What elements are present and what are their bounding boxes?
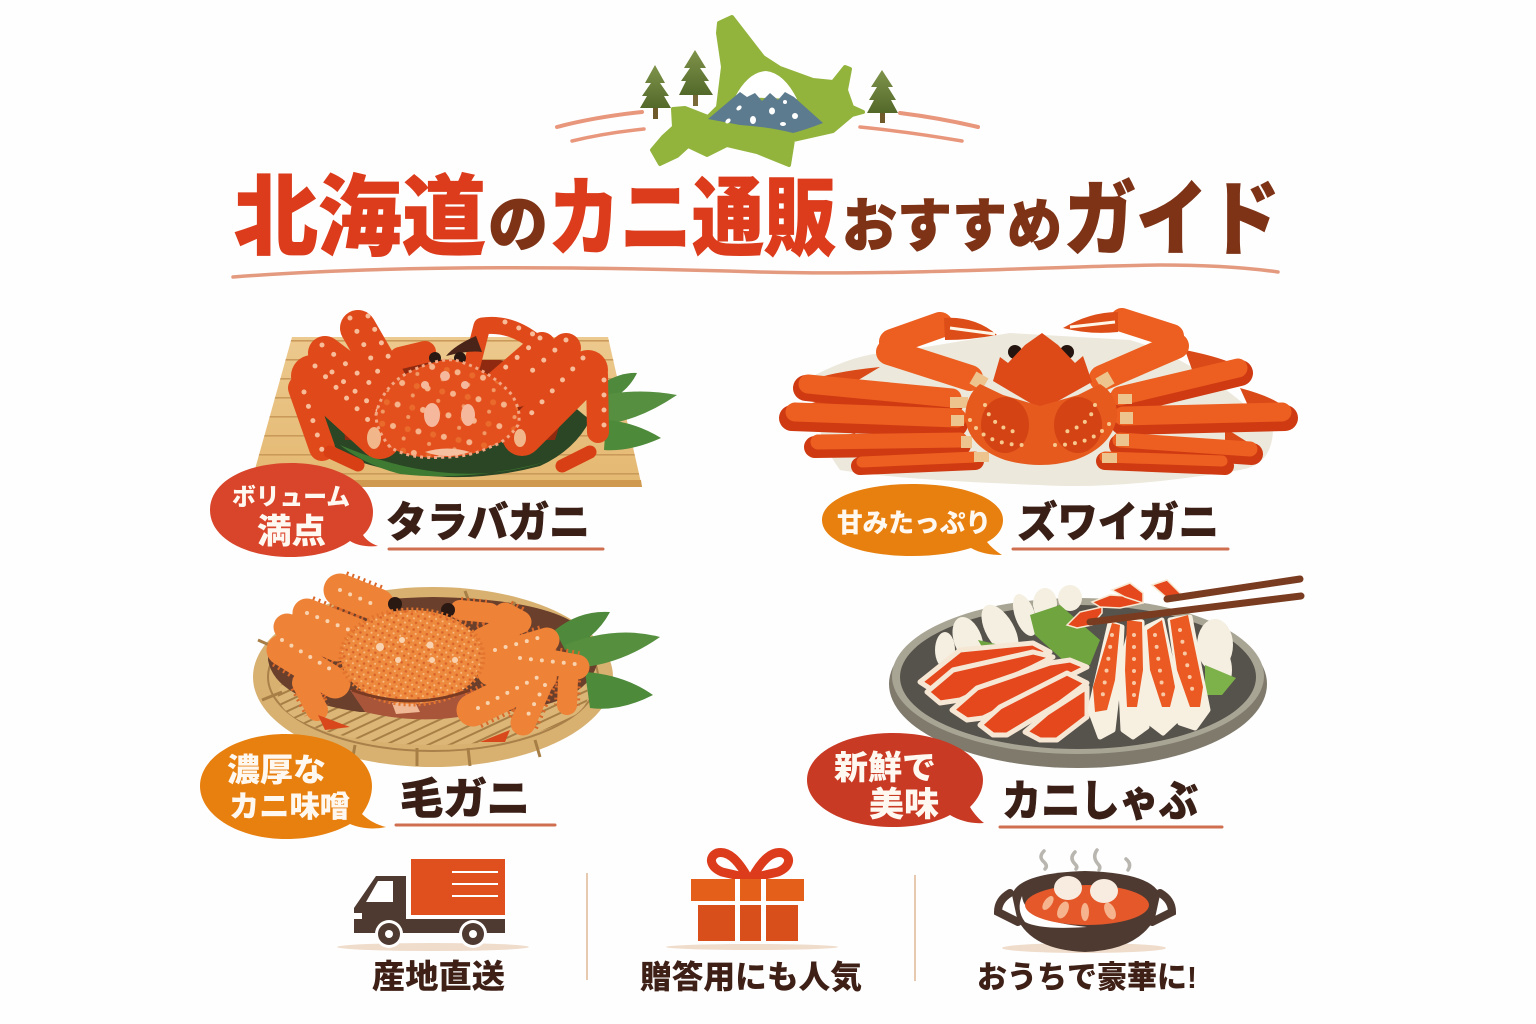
label: 産地直送: 産地直送 [372, 958, 505, 995]
title underline [233, 265, 1278, 277]
callout: ボリューム満点 [210, 463, 378, 557]
icon: snow-capped mountain [708, 71, 823, 133]
leg spots [304, 316, 604, 450]
leg joints [950, 371, 1133, 463]
illustration: held crab slice [1067, 580, 1182, 628]
label: おうちで豪華に!: おうちで豪華に! [977, 960, 1197, 995]
illustration: cabbage and greens [935, 585, 1236, 695]
decorative swoosh lines left and right [557, 112, 978, 141]
illustration: crab legs right [1090, 615, 1208, 737]
feature: direct shipping [337, 859, 529, 995]
pincers [944, 312, 1118, 340]
divider [914, 875, 916, 981]
title: ガイド [1064, 175, 1280, 266]
legs dark underside [792, 373, 1285, 466]
divider [586, 873, 588, 980]
callout: 濃厚なカニ味噌: 濃厚な [227, 752, 326, 788]
title: カニ通販 [548, 171, 836, 267]
panel: kani shabu [807, 579, 1301, 827]
feature: home luxury [977, 850, 1197, 995]
title: おすすめ [842, 194, 1062, 259]
illustration: bamboo basket [253, 587, 613, 767]
label: ズワイガニ: ズワイガニ [1017, 499, 1219, 546]
legs spikes [282, 590, 577, 723]
carapace [965, 384, 1117, 465]
illustration: dark leaf under crab [302, 390, 590, 477]
illustration: sliced crab meat left [920, 643, 1087, 740]
callout: 甘みたっぷり: 甘みたっぷり [837, 508, 991, 538]
illustration: chopsticks [1090, 579, 1301, 622]
icon: right tree [867, 70, 898, 123]
illustration: bamboo board [250, 337, 642, 487]
callout: 甘みたっぷり [822, 484, 1003, 556]
eyes [429, 352, 466, 364]
icon: gift box [666, 852, 838, 950]
callout: 新鮮で美味: 新鮮で [834, 749, 936, 786]
callout: ボリューム満点: 満点 [257, 513, 326, 551]
legs top [795, 368, 1282, 462]
label: 毛ガニ: 毛ガニ [400, 776, 530, 824]
icon: delivery truck [337, 859, 529, 951]
panel: kegani hairy crab [200, 587, 660, 839]
icon: Hokkaido map [652, 17, 863, 165]
leg tips [787, 350, 1290, 452]
body mass behind legs [340, 360, 575, 440]
callout: ボリューム満点: ボリューム [232, 484, 350, 511]
illustration: garnish leaves [600, 373, 677, 450]
title: の [488, 191, 548, 260]
title: 北海道 [234, 168, 486, 267]
illustration: plate [814, 333, 1273, 486]
underside [350, 690, 475, 719]
feature: gift [640, 852, 862, 995]
illustration: king crab [301, 316, 604, 466]
carapace [376, 360, 519, 458]
carapace [341, 610, 483, 704]
label: カニしゃぶ: カニしゃぶ [1002, 778, 1198, 826]
icon: hot pot [998, 850, 1172, 953]
illustration: snow crab [787, 312, 1290, 466]
label: 贈答用にも人気: 贈答用にも人気 [640, 959, 862, 995]
label: タラバガニ: タラバガニ [386, 499, 590, 546]
claw tips [318, 715, 510, 742]
icon: middle tree [679, 50, 713, 106]
leg spots [282, 590, 575, 720]
panel: zuwai crab [787, 312, 1290, 556]
panel: taraba crab [210, 316, 677, 557]
icon: left tree [640, 65, 671, 119]
eyes [388, 597, 455, 617]
illustration: garnish leaves [555, 612, 660, 709]
head [993, 333, 1092, 410]
arms [889, 320, 1176, 378]
callout: 新鮮で美味: 美味 [869, 786, 939, 824]
header illustration: Hokkaido map with mountain and trees [557, 17, 978, 165]
illustration: hairy crab [282, 590, 577, 742]
eyes [1008, 345, 1074, 359]
legs [282, 590, 577, 723]
illustration: stone plate [889, 598, 1267, 768]
claw [446, 336, 482, 356]
title [234, 168, 1280, 267]
callout: 濃厚なカニ味噌: カニ味噌 [229, 791, 350, 824]
callout: 新鮮で美味 [807, 733, 984, 827]
legs [301, 325, 598, 466]
callout: 濃厚なカニ味噌 [200, 734, 386, 839]
